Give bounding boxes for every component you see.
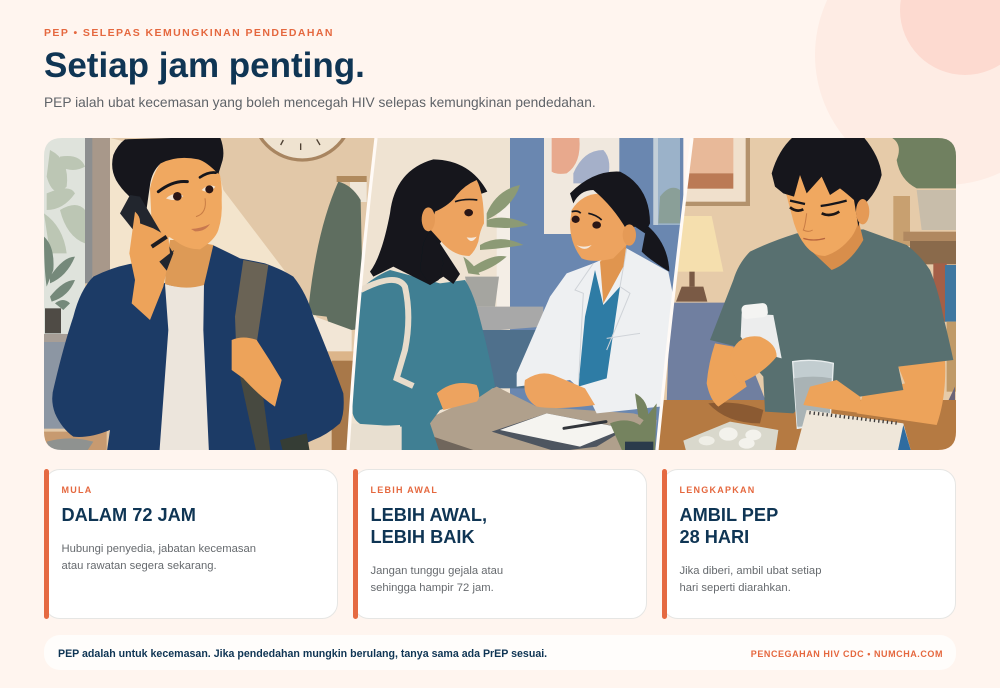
card 2 label: LEBIH AWAL bbox=[370, 485, 438, 495]
card 2: earlier bbox=[353, 469, 647, 619]
scene 1: man on phone bbox=[44, 138, 374, 450]
card 3: complete bbox=[662, 469, 956, 619]
eyebrow: PEP • SELEPAS KEMUNGKINAN PENDEDAHAN bbox=[44, 27, 334, 39]
card 1 body: atau rawatan segera sekarang. bbox=[62, 560, 217, 572]
scene 3: man holding pill bottle bbox=[658, 138, 956, 450]
card 1 label: MULA bbox=[62, 485, 92, 495]
card 3 body: hari seperti diarahkan. bbox=[680, 582, 791, 594]
card 1 heading: DALAM 72 JAM bbox=[62, 505, 196, 525]
card 3 heading: AMBIL PEP bbox=[680, 505, 778, 525]
illustration strip: three scenes bbox=[44, 138, 956, 450]
footer bar bbox=[44, 635, 956, 670]
title: Setiap jam penting. bbox=[44, 46, 365, 84]
card 1 body bbox=[62, 543, 256, 572]
card 3 label: LENGKAPKAN bbox=[680, 485, 756, 495]
card 2 heading bbox=[370, 505, 487, 547]
card 2 body bbox=[370, 565, 503, 594]
subtitle: PEP ialah ubat kecemasan yang boleh mencegah HIV selepas kemungkinan pendedahan. bbox=[44, 95, 596, 110]
scene dividers bbox=[348, 138, 692, 450]
footer source: PENCEGAHAN HIV CDC • NUMCHA.COM bbox=[751, 649, 943, 659]
card 3 heading: 28 HARI bbox=[680, 527, 749, 547]
card 2 heading: LEBIH AWAL, bbox=[370, 505, 487, 525]
card 2 heading: LEBIH BAIK bbox=[370, 527, 475, 547]
footer note: PEP adalah untuk kecemasan. Jika pendedahan mungkin berulang, tanya sama ada PrEP sesuai. bbox=[58, 648, 547, 660]
card 2 body: Jangan tunggu gejala atau bbox=[370, 565, 503, 577]
card 3 body: Jika diberi, ambil ubat setiap bbox=[680, 565, 821, 577]
card 1: start bbox=[44, 469, 338, 619]
card 3 heading bbox=[680, 505, 778, 547]
scene 2: patient talking with clinician bbox=[340, 130, 683, 463]
card 2 body: sehingga hampir 72 jam. bbox=[370, 582, 494, 594]
card 1 body: Hubungi penyedia, jabatan kecemasan bbox=[62, 543, 256, 555]
card 3 body bbox=[680, 565, 821, 594]
